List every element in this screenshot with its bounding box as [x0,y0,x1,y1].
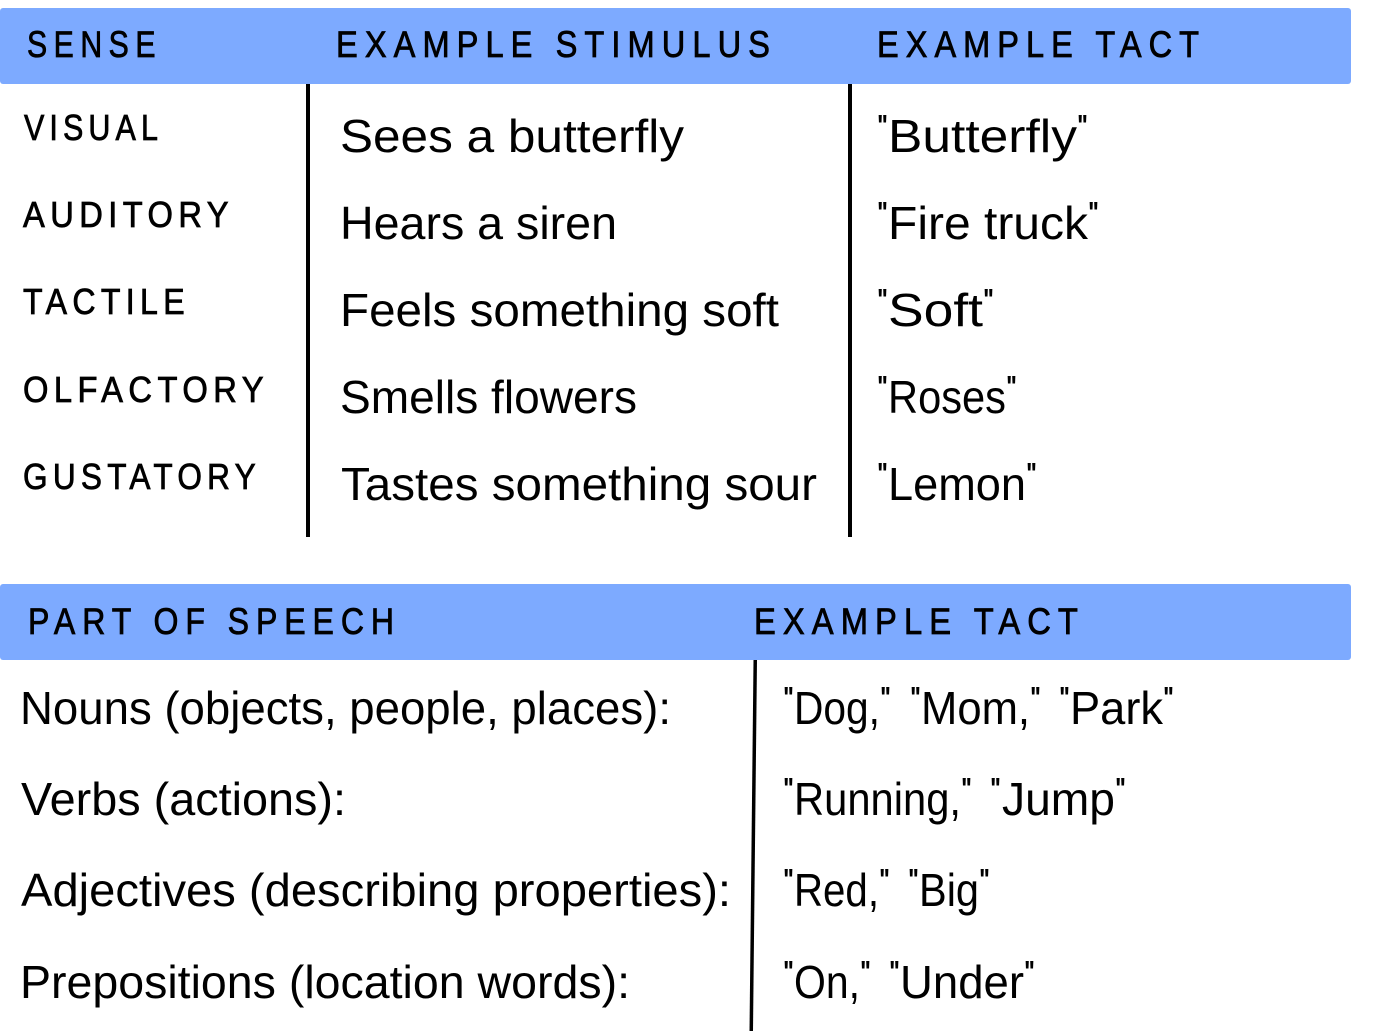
sense labels: GUSTATORY [23,456,261,497]
example tacts by part of speech: " [784,864,793,897]
example tacts: " [878,371,887,404]
example tacts by part of speech: " [1116,773,1125,806]
example tacts by part of speech: Mom, [921,682,1030,734]
example tacts by part of speech: " [784,773,793,806]
example tacts by part of speech: " [980,864,989,897]
example tacts by part of speech: " [991,773,1000,806]
example tacts by part of speech: " [784,682,793,715]
parts of speech: Prepositions (location words): [20,956,630,1008]
example tacts by part of speech: " [1060,682,1069,715]
example tacts by part of speech: " [861,956,870,989]
example tacts by part of speech: " [1031,682,1040,715]
example tacts: " [1027,458,1036,491]
example tacts by part of speech: Park [1070,682,1164,734]
example tacts by part of speech: " [784,956,793,989]
example tacts by part of speech: Under [900,956,1024,1008]
column divider: part of speech and tact [750,660,757,1031]
example tacts by part of speech: Red, [794,864,879,916]
example tacts: " [878,284,887,317]
example tacts: " [984,284,993,317]
example tacts by part of speech: " [1025,956,1034,989]
example tacts by part of speech: Running, [794,773,961,825]
sense labels [23,107,269,497]
example tacts: " [1089,197,1098,230]
example stimuli: Sees a butterfly [340,110,684,162]
example tacts [878,110,1098,510]
example tacts: " [878,110,887,143]
example tacts: " [1007,371,1016,404]
example tacts by part of speech: " [881,682,890,715]
sense labels: VISUAL [24,107,163,148]
parts of speech: Verbs (actions): [21,773,346,825]
example stimuli: Feels something soft [340,284,779,336]
example tacts by part of speech: " [880,864,889,897]
example stimuli: Tastes something sour [341,458,817,510]
example tacts: " [878,458,887,491]
panel: senses table [0,8,1351,537]
example tacts by part of speech [784,682,1173,1008]
example tacts by part of speech: " [1164,682,1173,715]
example tacts: Roses [888,371,1006,423]
example tacts: " [1078,110,1087,143]
sense labels: TACTILE [23,281,190,322]
sense labels: OLFACTORY [23,369,269,410]
example stimuli: Hears a siren [340,197,617,249]
header bar: parts of speech table: EXAMPLE TACT [754,601,1085,642]
parts of speech [20,682,731,1008]
example tacts: " [878,197,887,230]
example tacts: Butterfly [888,110,1077,162]
header bar: senses table: EXAMPLE TACT [877,24,1206,65]
example tacts by part of speech: On, [794,956,860,1008]
example tacts by part of speech: " [911,682,920,715]
header bar: senses table: SENSE [27,24,162,65]
example tacts by part of speech: " [909,864,918,897]
header bar: parts of speech table: PART OF SPEECH [28,601,401,642]
header bar: senses table [0,8,1351,84]
example tacts: Fire truck [888,197,1089,249]
column divider: stimulus and tact [848,84,852,537]
example tacts: Soft [888,284,983,336]
column divider: sense and stimulus [306,84,310,537]
example tacts by part of speech: Dog, [794,682,880,734]
example stimuli [340,110,817,510]
header bar: senses table: EXAMPLE STIMULUS [336,24,777,65]
example stimuli: Smells flowers [340,371,637,423]
example tacts by part of speech: " [890,956,899,989]
header bar: parts of speech table [0,584,1351,660]
example tacts: Lemon [888,458,1026,510]
sense labels: AUDITORY [23,194,234,235]
example tacts by part of speech: " [962,773,971,806]
parts of speech: Nouns (objects, people, places): [20,682,671,734]
example tacts by part of speech: Jump [1002,773,1115,825]
parts of speech: Adjectives (describing properties): [21,864,731,916]
panel: parts of speech table [0,584,1351,1031]
example tacts by part of speech: Big [919,864,979,916]
